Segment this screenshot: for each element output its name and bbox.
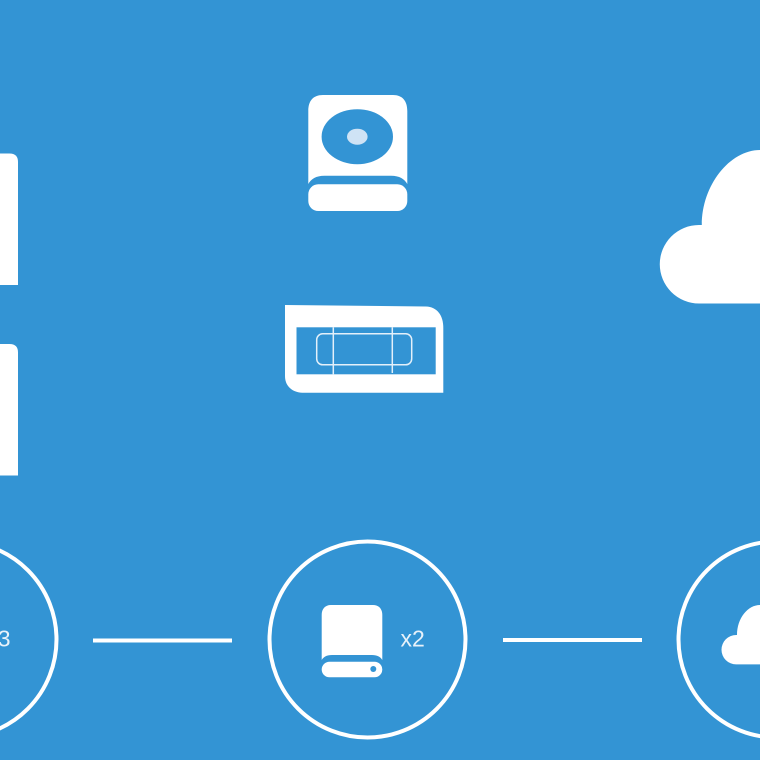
step circle: left servers <box>0 542 56 738</box>
icon: server bottom panel (cropped) <box>0 344 18 476</box>
connector: right <box>503 638 642 642</box>
connector: left <box>93 638 232 642</box>
step circle: right cloud <box>678 542 760 738</box>
icon: small hard disk <box>322 605 382 677</box>
icon: small cloud <box>722 605 760 664</box>
step circle: middle disks <box>270 542 466 738</box>
icon: server top panel (cropped) <box>0 154 18 285</box>
label: x2: x2 <box>400 626 425 652</box>
icon: large cloud <box>660 150 760 304</box>
icon: tape cartridge <box>285 305 443 393</box>
icon: large hard disk <box>308 95 407 211</box>
